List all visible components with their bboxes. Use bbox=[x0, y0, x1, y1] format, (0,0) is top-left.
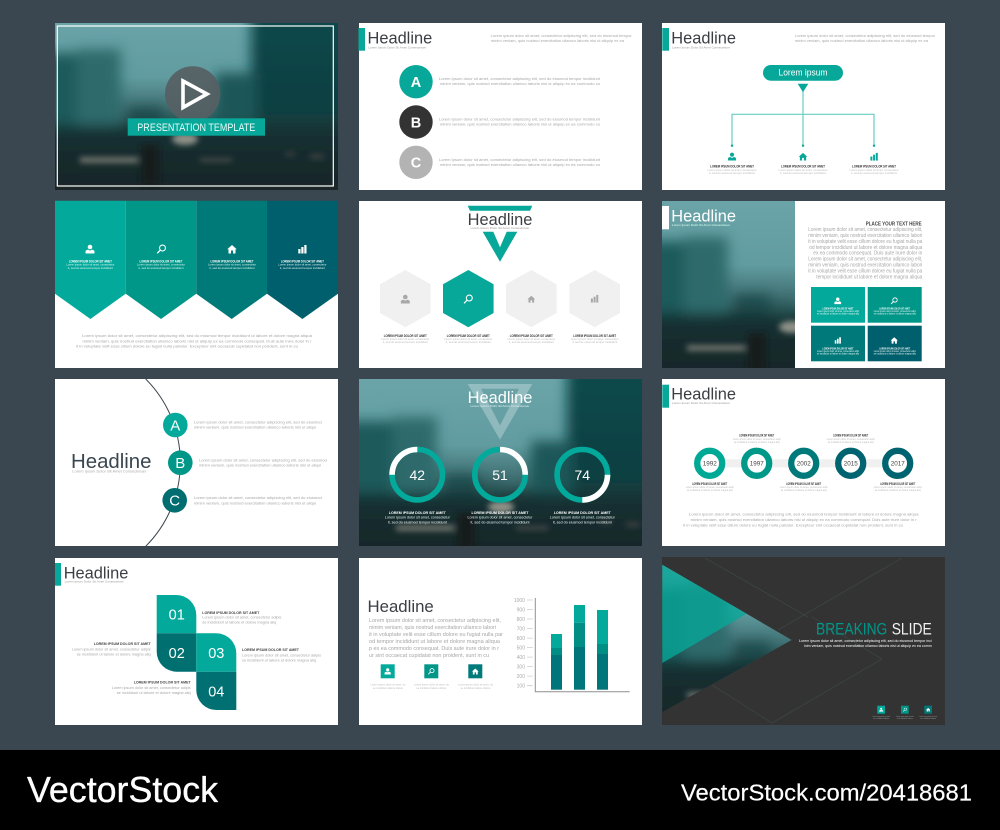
icon box 2: se incididunt labore bbox=[897, 717, 913, 720]
column 3: LOREM IPSUM DOLOR SIT AMET bbox=[210, 259, 254, 263]
pill: lorem ipsum bbox=[763, 65, 843, 81]
icon box 3 bbox=[919, 706, 937, 720]
heading: Headline bbox=[368, 597, 434, 616]
panel: timeline slide bbox=[662, 379, 945, 546]
node 2017 bbox=[874, 451, 922, 492]
bar chart bbox=[514, 598, 630, 692]
node 2015: Lorem ipsum dolor sit amet, consectetur adipi bbox=[827, 437, 875, 441]
node 2002: Lorem ipsum dolor sit amet, consectetur adipi bbox=[780, 485, 828, 489]
subtitle: Lorem Ipsum Dolor Sit Amet Consectetuer bbox=[470, 404, 530, 408]
heading: Headline bbox=[468, 211, 532, 229]
ring 74 bbox=[550, 450, 616, 524]
body text: minim veniam, quis nostrud exercitation ullamco laboris nisi ut aliquip ex ea commodo consequat. Duis aute irure dolor in r bbox=[82, 338, 312, 343]
item B: B bbox=[175, 455, 185, 472]
intro text: Lorem ipsum dolor sit amet, consectetur adipiscing elit, sed do eiusmod tempor bbox=[491, 33, 632, 38]
column 1: LOREM IPSUM DOLOR SIT AMET bbox=[69, 259, 112, 263]
paragraph bbox=[808, 227, 923, 280]
tile 3: se incididunt ut labore et dolore magna aliq bbox=[817, 353, 860, 356]
node 1997: LOREM IPSUM DOLOR SIT AMET bbox=[739, 434, 774, 438]
node 1997: Lorem ipsum dolor sit amet, consectetur adipi bbox=[733, 437, 781, 441]
heading: Headline bbox=[671, 29, 736, 47]
column 3 bbox=[196, 201, 267, 319]
icon box 2: Lorem ipsum dolor sit amet bbox=[896, 715, 914, 718]
block 01: se incididunt ut labore et dolore magna aliq bbox=[202, 619, 276, 624]
hexagon 4: LOREM IPSUM DOLOR SIT AMET bbox=[573, 334, 616, 338]
arc bbox=[146, 379, 180, 546]
node 1992: Lorem ipsum dolor sit amet, consectetur adipi bbox=[686, 485, 734, 489]
intro text: Lorem ipsum dolor sit amet, consectetur adipiscing elit, sed do eiusmod tempor bbox=[795, 33, 936, 38]
panel: numbered blocks slide bbox=[55, 558, 338, 725]
accent bar bbox=[662, 206, 669, 229]
node 1997: 1997 bbox=[750, 461, 764, 468]
tile 4: se incididunt ut labore et dolore magna aliq bbox=[874, 353, 916, 356]
node 1997: se incididunt ut labore et dolore magna aliq bbox=[734, 440, 780, 444]
tile 4 bbox=[868, 326, 922, 361]
node 2017: LOREM IPSUM DOLOR SIT AMET bbox=[880, 482, 915, 486]
ring 42: LOREM IPSUM DOLOR SIT AMET bbox=[389, 511, 446, 515]
node 2015: 2015 bbox=[844, 461, 858, 468]
tile 2: Lorem ipsum dolor sit amet, consectetur adipi bbox=[874, 310, 916, 313]
intro text: minim veniam, quis nostrud exercitation ullamco laboris nisi ut aliquip ex ea bbox=[795, 38, 929, 43]
item C: Lorem ipsum dolor sit amet, consectetur adipiscing elit, sed do eiusmod tempor incididunt bbox=[439, 157, 601, 162]
heading: Headline bbox=[671, 386, 736, 404]
column 4: LOREM IPSUM DOLOR SIT AMET bbox=[281, 259, 324, 263]
hexagon 1: LOREM IPSUM DOLOR SIT AMET bbox=[384, 334, 427, 338]
panel: ABC list slide bbox=[358, 23, 642, 190]
node 2017: Lorem ipsum dolor sit amet, consectetur adipi bbox=[874, 485, 922, 489]
block 04: LOREM IPSUM DOLOR SIT AMET bbox=[134, 679, 191, 684]
ring 51: LOREM IPSUM DOLOR SIT AMET bbox=[472, 511, 529, 515]
item B bbox=[168, 450, 327, 475]
subtitle: Lorem Ipsum Dolor Sit Amet Consectetuer bbox=[72, 470, 147, 474]
icon box 1 bbox=[370, 664, 406, 690]
node 1992: LOREM IPSUM DOLOR SIT AMET bbox=[692, 482, 727, 486]
hexagon 1: it, sed do eiusmod tempor incididunt bbox=[383, 340, 428, 344]
panel: title slide bbox=[55, 23, 338, 190]
block 02 bbox=[72, 633, 196, 672]
icon box 2 bbox=[414, 664, 450, 690]
item B: Lorem ipsum dolor sit amet, consectetur adipiscing elit, sed do eiusmod bbox=[199, 457, 327, 462]
item A: A bbox=[170, 417, 180, 434]
block 01 bbox=[157, 595, 281, 633]
branch 1: it, sed do eiusmod tempor incididunt bbox=[709, 171, 755, 175]
icon box 3: se incididunt labore dolore bbox=[460, 687, 491, 690]
column 2: it, sed do eiusmod tempor incididunt bbox=[138, 266, 184, 270]
paragraph: od tempor incididunt ut labore et dolore magna aliqua bbox=[369, 639, 501, 645]
icon box 2: se incididunt labore dolore bbox=[416, 687, 447, 690]
y axis labels: 500 bbox=[517, 645, 525, 651]
branch 1: LOREM IPSUM DOLOR SIT AMET bbox=[710, 164, 754, 168]
item A: minim veniam, quis nostrud exercitation ullamco laboris nisi ut aliqui bbox=[194, 425, 316, 430]
block 03: LOREM IPSUM DOLOR SIT AMET bbox=[242, 647, 300, 652]
ring 74: 74 bbox=[575, 467, 590, 483]
block 04: Lorem ipsum dolor sit amet, consectetur adipis bbox=[112, 685, 191, 690]
icon box 3: se incididunt labore bbox=[920, 717, 936, 720]
icon box 3: Lorem ipsum dolor sit amet bbox=[919, 715, 937, 718]
teal triangle overlay bbox=[662, 565, 747, 663]
paragraph: p ex ea commodo consequat. Duis aute irure dolor in r bbox=[369, 646, 499, 652]
body text: minim veniam, quis nostrud exercitation ullamco laboris nisi ut aliquip ex ea commodo consequat. Duis aute irure dolor in r bbox=[691, 517, 917, 522]
node 1992 bbox=[686, 451, 734, 492]
tile 1: LOREM IPSUM DOLOR SIT AMET bbox=[822, 306, 854, 310]
icon: play button bbox=[165, 66, 220, 122]
paragraph: minim veniam, quis nostrud exercitation ullamco labori bbox=[808, 262, 922, 268]
item C: Lorem ipsum dolor sit amet, consectetur adipiscing elit, sed do eiusmod bbox=[194, 495, 322, 500]
node 2002 bbox=[780, 451, 828, 492]
subtitle: Lorem Ipsum Dolor Sit Amet Consectetuer bbox=[470, 226, 530, 230]
ring 74: it, sed do eiusmod tempor incididunt bbox=[553, 520, 613, 524]
y axis labels: 1000 bbox=[514, 598, 525, 604]
panel: progress rings slide bbox=[359, 379, 642, 546]
text heading: PLACE YOUR TEXT HERE bbox=[866, 222, 922, 228]
accent bar bbox=[662, 28, 669, 51]
item C bbox=[162, 488, 322, 513]
tile 3 bbox=[811, 326, 865, 361]
item B: B bbox=[411, 115, 421, 131]
tile 2 bbox=[868, 287, 922, 323]
subtitle: Lorem Ipsum Dolor Sit Amet Consectetuer bbox=[672, 223, 730, 227]
intro text bbox=[491, 33, 632, 43]
tile 2: LOREM IPSUM DOLOR SIT AMET bbox=[879, 306, 911, 310]
panel: hexagons slide bbox=[359, 201, 642, 368]
hexagon 2 active: it, sed do eiusmod tempor incididunt bbox=[446, 340, 491, 344]
subtitle: Lorem Ipsum Dolor Sit Amet Consectetuer bbox=[672, 46, 730, 50]
hexagon 2 active: LOREM IPSUM DOLOR SIT AMET bbox=[447, 334, 490, 338]
block 03: 03 bbox=[208, 646, 224, 662]
item A: minim veniam, quis nostrud exercitation ullamco laboris nisi ut aliquip ex ea commodo co bbox=[440, 81, 601, 86]
triangle top bar bbox=[468, 206, 532, 211]
body text bbox=[76, 333, 313, 349]
node 1997 bbox=[733, 434, 781, 476]
block 03: Lorem ipsum dolor sit amet, consectetur adipis bbox=[242, 652, 321, 658]
paragraph: it in voluptate velit esse cillum dolore eu fugiat nulla par bbox=[369, 632, 503, 638]
item A bbox=[399, 65, 601, 98]
ring 74: LOREM IPSUM DOLOR SIT AMET bbox=[554, 511, 611, 515]
branch 1: Lorem ipsum dolor sit amet, consectetur bbox=[708, 168, 756, 172]
column 1 bbox=[55, 201, 126, 319]
column 1: Lorem ipsum dolor sit amet, consectetur bbox=[66, 263, 114, 267]
icon box 1: Lorem ipsum dolor sit amet bbox=[872, 715, 890, 718]
accent bar bbox=[662, 385, 669, 408]
item C: C bbox=[169, 493, 180, 510]
column 4: it, sed do eiusmod tempor incididunt bbox=[280, 266, 325, 270]
branch 1 bbox=[708, 153, 756, 175]
node 2002: LOREM IPSUM DOLOR SIT AMET bbox=[786, 482, 821, 486]
icon box 1: Lorem ipsum dolor sit amet, do bbox=[370, 684, 406, 686]
description: Lorem ipsum dolor sit amet, consectetur adipiscing elit, sed do eiusmod tempor inci bbox=[799, 639, 932, 643]
icon box 2: Lorem ipsum dolor sit amet, do bbox=[414, 684, 450, 686]
bar 2 bbox=[574, 605, 585, 690]
heading: Headline bbox=[671, 208, 736, 226]
item B: minim veniam, quis nostrud exercitation ullamco laboris nisi ut aliqui bbox=[199, 463, 321, 468]
item A bbox=[163, 413, 322, 437]
item C: C bbox=[411, 156, 422, 172]
translucent triangle bbox=[468, 384, 532, 440]
heading: Headline bbox=[71, 451, 152, 473]
ring 51: Lorem ipsum dolor sit amet, consectetur bbox=[468, 516, 533, 520]
body text: it in voluptate velit esse cillum dolore eu fugiat nulla pariatur. Excepteur sint occaecat cupidatat non proident, sunt in cu bbox=[76, 344, 298, 349]
item A: Lorem ipsum dolor sit amet, consectetur adipiscing elit, sed do eiusmod tempor incididunt bbox=[439, 76, 601, 81]
ring 42 bbox=[385, 450, 451, 524]
block 02: se incididunt ut labore et dolore magna aliq bbox=[77, 652, 151, 656]
branch 3: it, sed do eiusmod tempor incididunt bbox=[851, 171, 897, 175]
item A: A bbox=[411, 75, 422, 91]
ring 51: 51 bbox=[492, 467, 508, 483]
item C: minim veniam, quis nostrud exercitation ullamco laboris nisi ut aliqui bbox=[194, 500, 316, 505]
paragraph: ur sint occaecat cupidatat non proident, sunt in cu bbox=[369, 653, 489, 659]
icon box 3 bbox=[458, 664, 494, 690]
y axis labels: 700 bbox=[517, 626, 525, 632]
triangle lower V bbox=[483, 232, 517, 262]
body text bbox=[683, 512, 919, 527]
column 2: LOREM IPSUM DOLOR SIT AMET bbox=[140, 259, 183, 263]
paragraph: minim veniam, quis nostrud exercitation ullamco labori bbox=[369, 625, 496, 631]
panel: four arrow columns slide bbox=[55, 201, 338, 368]
icon box 2 bbox=[896, 706, 914, 720]
accent bar bbox=[55, 563, 61, 586]
y axis labels: 800 bbox=[517, 617, 525, 623]
item C bbox=[399, 146, 601, 179]
white frame bbox=[57, 26, 333, 186]
body text: Lorem ipsum dolor sit amet, consectetur adipiscing elit, sed do eiusmod tempor incididunt ut labore et dolore magna aliqua bbox=[689, 512, 919, 517]
heading: Headline bbox=[468, 389, 532, 407]
subtitle: Lorem Ipsum Dolor Sit Amet Consectetuer bbox=[368, 46, 426, 50]
description bbox=[799, 639, 932, 648]
hexagon 3 bbox=[506, 270, 557, 344]
block 04: se incididunt ut labore et dolore magna aliq bbox=[117, 690, 191, 695]
icon box 1: se incididunt labore bbox=[873, 717, 889, 720]
block 02: 02 bbox=[169, 646, 185, 662]
block 01: LOREM IPSUM DOLOR SIT AMET bbox=[202, 610, 260, 615]
hexagon 3: it, sed do eiusmod tempor incididunt bbox=[509, 340, 554, 344]
node 2017: 2017 bbox=[891, 461, 905, 468]
branch 2: it, sed do eiusmod tempor incididunt bbox=[780, 171, 826, 175]
hexagon 4: Lorem ipsum dolor sit amet, consectetur bbox=[571, 337, 619, 341]
intro text: minim veniam, quis nostrud exercitation ullamco laboris nisi ut aliquip ex ea bbox=[491, 38, 625, 43]
tile 4: Lorem ipsum dolor sit amet, consectetur adipi bbox=[874, 350, 916, 353]
pill: lorem ipsum: Lorem ipsum bbox=[778, 68, 828, 79]
branch 3: LOREM IPSUM DOLOR SIT AMET bbox=[852, 164, 896, 168]
paragraph: it in voluptate velit esse cillum dolore eu fugiat nulla pa bbox=[808, 268, 923, 274]
y axis labels: 200 bbox=[517, 674, 525, 680]
hexagon 4 bbox=[569, 270, 620, 344]
footer bar bbox=[0, 750, 1000, 830]
tile 3: Lorem ipsum dolor sit amet, consectetur adipi bbox=[817, 350, 859, 353]
node 2015: LOREM IPSUM DOLOR SIT AMET bbox=[833, 434, 868, 438]
column 4: Lorem ipsum dolor sit amet, consectetur bbox=[278, 263, 326, 267]
tile 2: se incididunt ut labore et dolore magna aliq bbox=[874, 313, 916, 316]
title: BREAKING bbox=[816, 620, 887, 639]
hexagon 2 active: Lorem ipsum dolor sit amet, consectetur bbox=[444, 337, 492, 341]
ring 42: Lorem ipsum dolor sit amet, consectetur bbox=[385, 516, 451, 520]
paragraph: od tempor incididunt ut labore et dolore magna aliqua bbox=[809, 245, 923, 251]
hexagon 4: it, sed do eiusmod tempor incididunt bbox=[572, 340, 617, 344]
branch 3 bbox=[850, 153, 898, 175]
title: SLIDE bbox=[892, 620, 932, 639]
paragraph bbox=[369, 618, 503, 659]
block 04 bbox=[112, 672, 236, 710]
ring 42: 42 bbox=[410, 467, 425, 483]
node 2015: se incididunt ut labore et dolore magna aliq bbox=[828, 440, 874, 444]
banner: presentation template: PRESENTATION TEMPLATE bbox=[137, 122, 255, 134]
heading: Headline bbox=[368, 29, 432, 47]
blurred city photo bbox=[55, 23, 338, 190]
description: inim veniam, quis nostrud exercitation ullamco laboris nisi ut aliquip ex ea comm bbox=[804, 644, 932, 648]
y axis labels bbox=[514, 598, 525, 690]
item B: minim veniam, quis nostrud exercitation ullamco laboris nisi ut aliquip ex ea commodo co bbox=[440, 122, 601, 127]
icon box 1: se incididunt labore dolore bbox=[373, 687, 404, 690]
item C: minim veniam, quis nostrud exercitation ullamco laboris nisi ut aliquip ex ea commodo co bbox=[440, 162, 601, 167]
branch 3: Lorem ipsum dolor sit amet, consectetur bbox=[850, 168, 898, 172]
paragraph: minim veniam, quis nostrud exercitation ullamco labori bbox=[808, 233, 922, 239]
paragraph: it in voluptate velit esse cillum dolore eu fugiat nulla pa bbox=[808, 239, 923, 245]
panel: bar chart slide bbox=[359, 558, 642, 725]
ring 51: it, sed do eiusmod tempor incididunt bbox=[470, 520, 530, 524]
banner: presentation template bbox=[128, 118, 265, 136]
tile 1: Lorem ipsum dolor sit amet, consectetur adipi bbox=[817, 310, 859, 313]
body text: Lorem ipsum dolor sit amet, consectetur adipiscing elit, sed do eiusmod tempor incididunt ut labore et dolore magna aliqua bbox=[82, 333, 313, 338]
hexagon 3: LOREM IPSUM DOLOR SIT AMET bbox=[510, 334, 553, 338]
node 1992: se incididunt ut labore et dolore magna aliq bbox=[687, 488, 733, 492]
block 02: Lorem ipsum dolor sit amet, consectetur adipis bbox=[72, 646, 151, 652]
block 03: se incididunt ut labore et dolore magna aliq bbox=[242, 658, 316, 662]
hexagon 1 bbox=[380, 270, 431, 344]
image reference: VectorStock.com/20418681 bbox=[681, 780, 972, 806]
blurred photo bbox=[662, 201, 795, 368]
bar 1 bbox=[551, 634, 562, 690]
panel: arc list slide bbox=[55, 379, 338, 546]
ring 74: Lorem ipsum dolor sit amet, consectetur bbox=[550, 516, 616, 520]
hexagon 1: Lorem ipsum dolor sit amet, consectetur bbox=[381, 337, 429, 341]
timeline strip bbox=[710, 459, 898, 467]
column 2 bbox=[126, 201, 196, 319]
column 3: it, sed do eiusmod tempor incididunt bbox=[210, 266, 255, 270]
branch 2: Lorem ipsum dolor sit amet, consectetur bbox=[778, 168, 828, 172]
block 02: LOREM IPSUM DOLOR SIT AMET bbox=[94, 641, 151, 646]
node 2015 bbox=[827, 434, 875, 476]
blurred photo bbox=[359, 379, 642, 546]
node 2002: se incididunt ut labore et dolore magna aliq bbox=[781, 488, 827, 492]
y axis labels: 300 bbox=[517, 664, 525, 670]
column 1: it, sed do eiusmod tempor incididunt bbox=[68, 266, 113, 270]
column 4 bbox=[267, 201, 338, 319]
tile 3: LOREM IPSUM DOLOR SIT AMET bbox=[822, 346, 854, 350]
tile 1 bbox=[811, 287, 865, 323]
ring 51 bbox=[468, 450, 533, 524]
connector tree bbox=[731, 84, 875, 147]
subtitle: Lorem Ipsum Dolor Sit Amet Consectetuer bbox=[672, 401, 730, 405]
block 01: Lorem ipsum dolor sit amet, consectetur adipis bbox=[202, 614, 281, 619]
accent bar bbox=[358, 28, 365, 51]
block 04: 04 bbox=[208, 684, 224, 700]
icon box 3: Lorem ipsum dolor sit amet, do bbox=[458, 684, 494, 686]
branch 2 bbox=[778, 153, 828, 175]
block 03 bbox=[196, 633, 321, 672]
paragraph: Lorem ipsum dolor sit amet, consectetur adipiscing elit, bbox=[808, 227, 922, 233]
paragraph: Lorem ipsum dolor sit amet, consectetur adipiscing elit, bbox=[369, 618, 501, 624]
paragraph: tempor incididunt ut labore et dolore magna aliqua bbox=[816, 274, 923, 280]
panel: photo with tiles slide bbox=[662, 201, 945, 368]
panel: org tree slide bbox=[662, 23, 945, 190]
branch 2: LOREM IPSUM DOLOR SIT AMET bbox=[781, 164, 825, 168]
paragraph: ex ea commodo consequat. Duis aute irure dolor in bbox=[813, 251, 923, 257]
node 2002: 2002 bbox=[797, 461, 811, 468]
y axis labels: 400 bbox=[517, 655, 525, 661]
tile 4: LOREM IPSUM DOLOR SIT AMET bbox=[879, 346, 911, 350]
body text: it in voluptate velit esse cillum dolore eu fugiat nulla pariatur. Excepteur sint occaecat cupidatat non proident, sunt in cu bbox=[683, 522, 903, 527]
column 3: Lorem ipsum dolor sit amet, consectetur bbox=[208, 263, 256, 267]
panel: breaking slide bbox=[662, 557, 945, 725]
paragraph: Lorem ipsum dolor sit amet, consectetur adipiscing elit, bbox=[808, 256, 922, 262]
item B bbox=[399, 105, 601, 139]
item A: Lorem ipsum dolor sit amet, consectetur adipiscing elit, sed do eiusmod bbox=[194, 420, 322, 425]
photo triangle bbox=[662, 564, 792, 712]
node 2017: se incididunt ut labore et dolore magna aliq bbox=[875, 488, 921, 492]
hexagon 2 active bbox=[443, 270, 494, 344]
hexagon 3: Lorem ipsum dolor sit amet, consectetur bbox=[507, 337, 555, 341]
y axis labels: 900 bbox=[517, 607, 525, 613]
bar 3 bbox=[597, 610, 608, 690]
tile 1: se incididunt ut labore et dolore magna aliq bbox=[817, 313, 860, 316]
icon box 1 bbox=[872, 706, 890, 720]
node 1992: 1992 bbox=[703, 461, 717, 468]
item B: Lorem ipsum dolor sit amet, consectetur adipiscing elit, sed do eiusmod tempor incididunt bbox=[439, 117, 601, 122]
y axis labels: 600 bbox=[517, 636, 525, 642]
column 2: Lorem ipsum dolor sit amet, consectetur bbox=[137, 263, 185, 267]
block 01: 01 bbox=[169, 608, 185, 624]
y axis labels: 100 bbox=[517, 684, 525, 690]
intro text bbox=[795, 33, 936, 43]
heading: Headline bbox=[64, 565, 128, 583]
brand name: VectorStock bbox=[27, 769, 219, 810]
ring 42: it, sed do eiusmod tempor incididunt bbox=[388, 520, 448, 524]
subtitle: Lorem Ipsum Dolor Sit Amet Consectetuer bbox=[65, 580, 124, 584]
